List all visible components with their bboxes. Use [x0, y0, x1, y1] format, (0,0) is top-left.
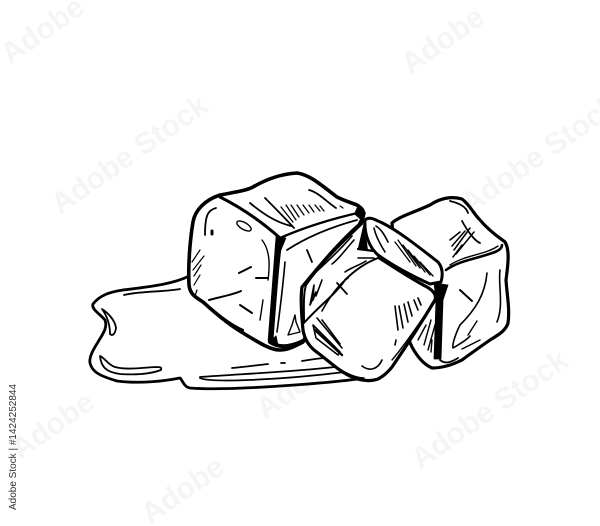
ice cube: front centre [301, 218, 442, 381]
top face details [250, 203, 291, 226]
faint diagonal watermarks: Adobe [5, 385, 100, 466]
left face details [205, 208, 216, 235]
upper sliver face [365, 218, 442, 284]
faint diagonal watermarks: Adobe [395, 0, 490, 81]
ice cube: right [392, 198, 509, 368]
faint diagonal watermarks: Adobe [250, 345, 345, 426]
puddle of water [90, 277, 358, 389]
stock credit text: Adobe Stock | #1424252844 [7, 384, 19, 510]
ice cube: left [189, 173, 366, 350]
corner shading [313, 318, 342, 355]
central vertical edge [268, 236, 286, 342]
faint diagonal watermarks: Adobe Stock [405, 343, 574, 476]
upper fractured face [304, 224, 378, 323]
faint diagonal watermarks: Adobe Stock [45, 88, 214, 221]
